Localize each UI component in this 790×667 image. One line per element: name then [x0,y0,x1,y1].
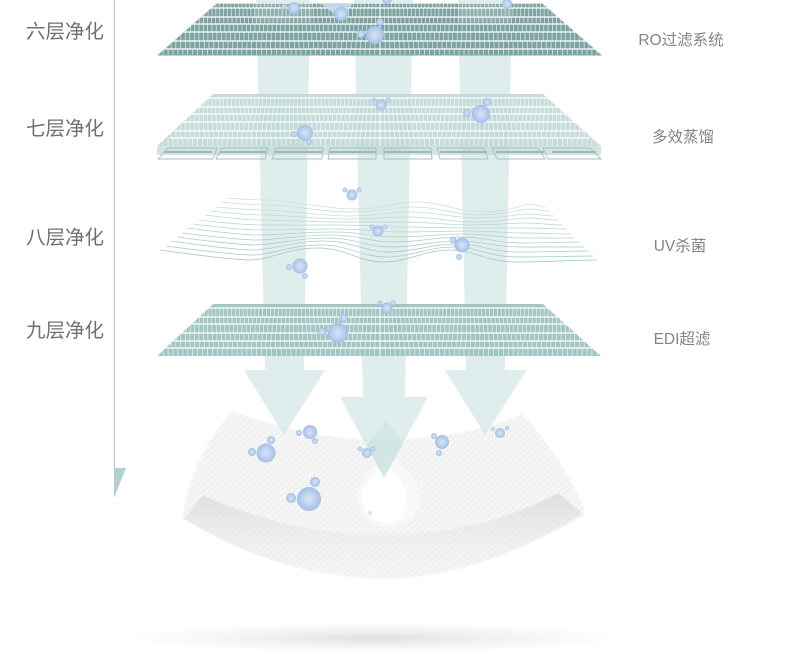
water molecules [248,0,512,511]
arrow left [244,0,325,435]
right labels: 多效蒸馏 [652,128,714,146]
left labels: 七层净化 [26,118,104,140]
layer eight wave mesh [160,198,597,262]
layer seven upper mesh [150,94,610,146]
left axis line with arrow [114,0,126,498]
right labels: RO过滤系统 [638,31,724,49]
right labels: UV杀菌 [654,237,706,255]
arrow centre inner tip [367,420,403,478]
layer nine mesh [150,304,610,356]
layer six mesh [150,3,610,56]
arrow centre [340,0,428,478]
arrow right [445,0,527,435]
wipe fabric [183,411,585,579]
wipe top sheet [183,411,585,579]
right labels: EDI超滤 [654,330,710,348]
ground shadow [123,623,627,653]
left labels: 九层净化 [26,320,104,342]
left labels: 六层净化 [26,21,104,43]
right labels [638,31,724,348]
layer seven lower mesh [157,146,601,159]
wipe folded lower band [184,493,584,579]
left labels: 八层净化 [26,227,104,249]
water drop [358,442,420,528]
left labels [26,21,104,342]
